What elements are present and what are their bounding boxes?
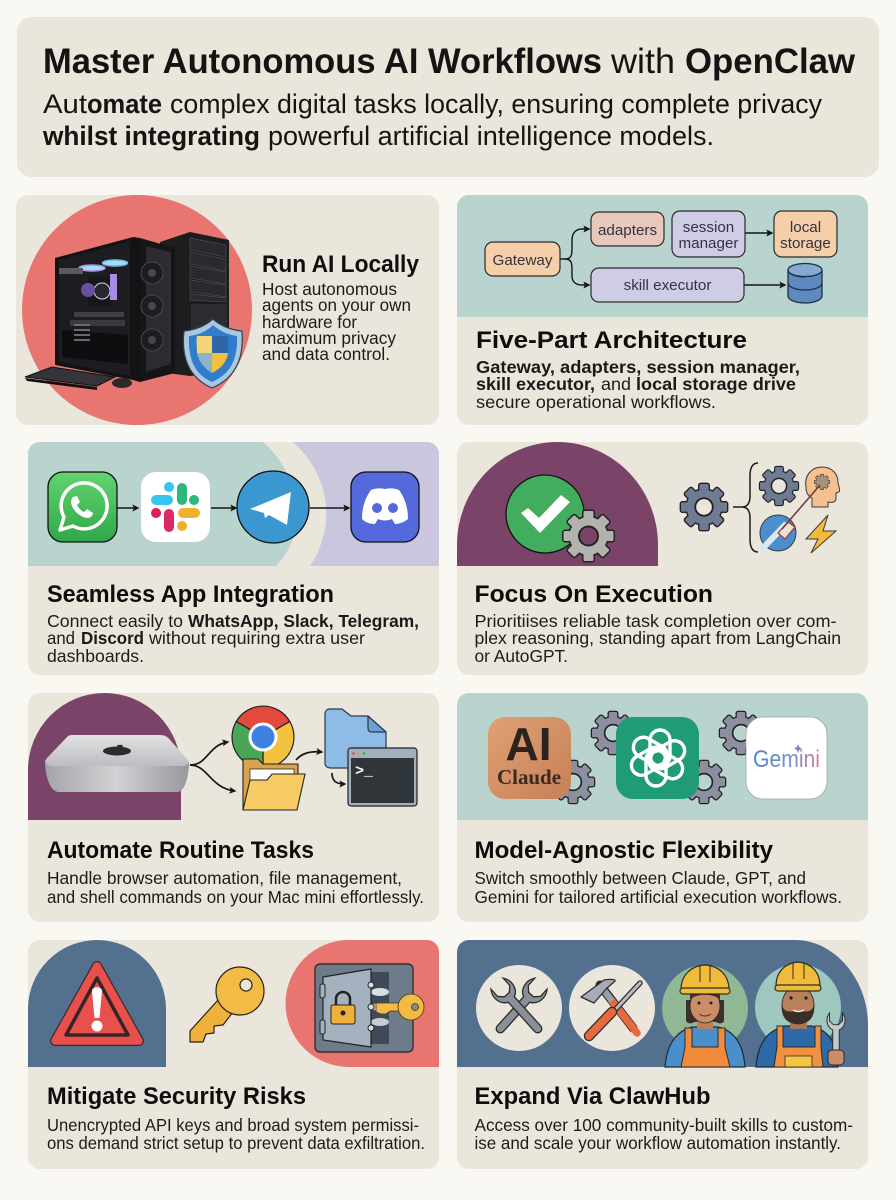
body text: skill executor,: [476, 374, 595, 394]
title: OpenClaw: [685, 41, 855, 81]
body text: hardware for: [262, 312, 357, 332]
architecture diagram: storage: [780, 235, 831, 252]
body text: dashboards.: [47, 646, 144, 666]
body text: Handle browser automation, file management,: [47, 868, 402, 888]
body text: and: [47, 628, 75, 648]
panel: five-part architecture: [457, 195, 868, 425]
body text: Gemini for tailored artificial execution workflows.: [474, 887, 842, 907]
body text: WhatsApp, Slack, Telegram,: [188, 611, 419, 631]
subtitle: omate: [87, 89, 162, 119]
red circle backdrop: [22, 195, 252, 425]
panel: expand via ClawHub: [457, 940, 868, 1169]
teal diagram area: [457, 195, 868, 317]
icon: Telegram: [237, 471, 309, 543]
body text: [262, 279, 411, 364]
body text: Access over 100 community-built skills to custom-: [474, 1115, 853, 1135]
body text: ise and scale your workflow automation instantly.: [474, 1133, 841, 1153]
icon: green check with gear: [506, 475, 614, 561]
subtitle: powerful artificial intelligence models.: [268, 121, 714, 151]
subtitle: complex digital tasks locally, ensuring complete privacy: [170, 89, 822, 119]
body text: [474, 611, 841, 666]
heading: Mitigate Security Risks: [47, 1083, 306, 1110]
body text: [47, 1115, 425, 1153]
architecture diagram: Gateway: [493, 252, 553, 269]
icon: WhatsApp: [48, 472, 117, 542]
panel: seamless app integration: [28, 442, 439, 675]
panel: focus on execution: [457, 442, 868, 675]
icon: large gear: [681, 484, 727, 530]
heading: Automate Routine Tasks: [47, 837, 314, 864]
body text: [474, 1115, 853, 1153]
background gears: [552, 712, 762, 803]
icon: hammer and screwdriver: [569, 965, 655, 1051]
body text: agents on your own: [262, 295, 411, 315]
body text: secure operational workflows.: [476, 392, 716, 412]
icon: database: [788, 264, 822, 303]
body text: without requiring extra user: [148, 628, 365, 648]
teal logo area: [457, 693, 868, 820]
panel: mitigate security risks: [28, 940, 439, 1169]
architecture diagram: skill executor: [624, 277, 711, 294]
icon: crossed wrenches: [476, 965, 562, 1051]
body text: [47, 868, 424, 907]
panel: model-agnostic flexibility: [457, 693, 868, 922]
icon: safe with key: [315, 964, 424, 1052]
icon: security shield: [183, 319, 242, 388]
body text: maximum privacy: [262, 328, 396, 348]
icon: Chrome: [232, 706, 294, 768]
body text: or AutoGPT.: [474, 646, 568, 666]
purple arch backdrop: [457, 442, 658, 566]
blue arch backdrop: [28, 940, 166, 1067]
icon: Mac mini: [45, 735, 189, 792]
heading: Run AI Locally: [262, 251, 419, 278]
blue backdrop: [457, 940, 868, 1067]
panel: run AI locally: [16, 195, 439, 425]
icon: Gemini: Gemini: [753, 746, 820, 773]
body text: Connect easily to: [47, 611, 183, 631]
heading: Seamless App Integration: [47, 581, 334, 608]
subtitle: Aut: [43, 89, 88, 119]
icon: folder: [243, 759, 305, 810]
body text: Switch smoothly between Claude, GPT, and: [474, 868, 806, 888]
icon: Discord: [351, 472, 419, 542]
icon: file: [325, 709, 386, 768]
body text: Discord: [81, 628, 144, 648]
subtitle: [42, 89, 822, 151]
body text: local storage drive: [636, 374, 796, 394]
teal and lavender backdrop: [28, 442, 439, 566]
icon: Slack: [141, 472, 210, 542]
icon: Claude: Claude: [497, 765, 561, 789]
body text: Host autonomous: [262, 279, 397, 299]
icon: Claude: [488, 717, 571, 799]
icon: terminal window: >_: [355, 763, 374, 780]
icon: small gear: [760, 467, 798, 505]
purple arch backdrop: [28, 693, 181, 820]
icon: terminal window: [348, 748, 417, 806]
heading: Model-Agnostic Flexibility: [474, 837, 773, 864]
body text: and shell commands on your Mac mini effortlessly.: [47, 887, 424, 907]
body text: and: [601, 374, 631, 394]
body text: Gateway, adapters, session manager,: [476, 357, 800, 377]
heading: Expand Via ClawHub: [474, 1083, 710, 1110]
icon: warning triangle: [55, 966, 139, 1041]
body text: ons demand strict setup to prevent data exfiltration.: [47, 1133, 425, 1153]
body text: Prioritiises reliable task completion over com-: [474, 611, 837, 631]
body text: plex reasoning, standing apart from LangChain: [474, 628, 841, 648]
panel: automate routine tasks: [28, 693, 439, 922]
icon: Claude: AI: [506, 718, 552, 770]
icon: bearded worker with wrench: [755, 962, 845, 1067]
body text: [474, 868, 842, 907]
icon: Gemini: [746, 717, 827, 799]
architecture diagram: session: [683, 219, 734, 236]
architecture diagram: [485, 211, 837, 302]
icon: lightning bolt: [806, 515, 836, 553]
icon: blue circle with tool: [760, 485, 820, 551]
brace: [733, 463, 758, 552]
red rounded backdrop: [286, 940, 439, 1067]
subtitle: whilst integrating: [42, 121, 260, 151]
architecture diagram: local: [790, 219, 821, 236]
icon: PC tower and server: [25, 232, 229, 390]
icon: head with gear: [806, 467, 840, 507]
branching arrows: [190, 742, 345, 791]
body text: [47, 611, 419, 666]
connecting arrows: [117, 507, 349, 509]
architecture diagram: adapters: [598, 222, 657, 239]
title: with: [610, 41, 675, 81]
architecture diagram: manager: [679, 235, 738, 252]
body text: Unencrypted API keys and broad system permissi-: [47, 1115, 419, 1135]
panel: header: [17, 17, 879, 177]
icon: female worker: [662, 965, 748, 1067]
title: Master Autonomous AI Workflows: [43, 41, 602, 81]
heading: Focus On Execution: [474, 581, 713, 608]
heading: Five-Part Architecture: [476, 327, 747, 354]
body text: and data control.: [262, 344, 390, 364]
icon: GPT: [616, 717, 699, 799]
icon: key: [190, 967, 264, 1042]
body text: [476, 357, 800, 412]
